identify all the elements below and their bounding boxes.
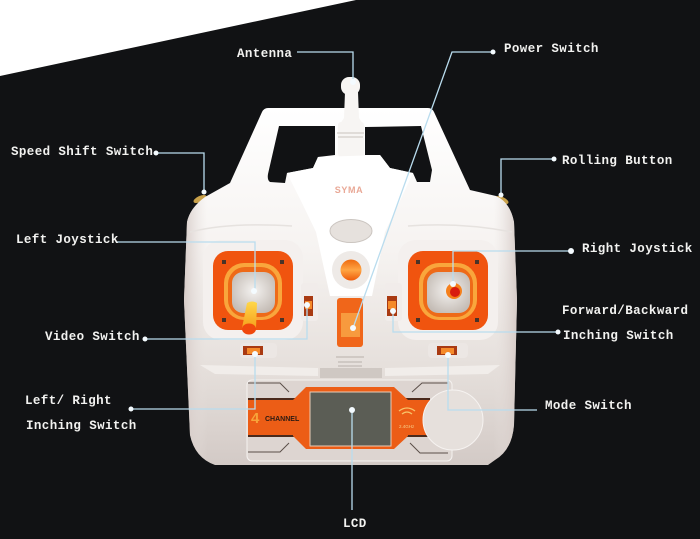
power slider — [336, 298, 364, 366]
right ring — [419, 263, 477, 320]
left ring — [224, 263, 282, 320]
lower ledge — [200, 365, 500, 376]
callout: left joystick: Left Joystick — [16, 233, 119, 247]
orange band — [248, 400, 430, 436]
right screws — [416, 260, 479, 322]
forward backward switch — [385, 283, 402, 321]
front panel — [247, 380, 452, 461]
controller handle and body — [184, 108, 517, 465]
callout: left right inching switch: Left/ Right — [25, 394, 112, 408]
mode switch — [428, 343, 468, 358]
right joystick — [398, 240, 498, 340]
left bezel — [203, 240, 303, 340]
callout: power switch: Power Switch — [504, 42, 599, 56]
left orange housing — [213, 251, 293, 330]
callout: speed shift switch: Speed Shift Switch — [11, 145, 153, 159]
callout: video switch — [45, 302, 310, 344]
oval window — [330, 220, 372, 242]
callout: speed shift switch — [11, 145, 206, 194]
shoulder button right — [494, 194, 510, 206]
video switch — [301, 283, 318, 321]
LCD screen — [310, 392, 391, 446]
callout: left joystick — [16, 233, 257, 294]
callout: video switch: Video Switch — [45, 330, 140, 344]
antenna — [337, 77, 365, 157]
orange lcd surround — [293, 387, 408, 449]
callout: rolling button — [498, 154, 673, 198]
right orange housing — [408, 251, 488, 330]
front panel: 2.4GHz — [399, 424, 415, 429]
callout: LCD: LCD — [343, 517, 367, 531]
callout: LCD — [343, 407, 367, 531]
callout: left right inching switch — [25, 351, 258, 433]
left right switch — [240, 343, 277, 358]
callout: left right inching switch: Inching Switch — [26, 419, 137, 433]
left screws — [222, 260, 284, 322]
left joystick — [203, 240, 303, 340]
controller — [184, 77, 517, 465]
callout: right joystick — [450, 242, 693, 287]
callout: mode switch: Mode Switch — [545, 399, 632, 413]
callout: forward backward inching switch — [390, 304, 688, 343]
circuit traces — [248, 383, 448, 453]
grip highlights — [190, 225, 512, 232]
callout: forward backward inching switch: Inching Switch — [563, 329, 674, 343]
wifi icon — [399, 408, 415, 414]
white corner wedge — [0, 0, 356, 76]
right stick top — [446, 283, 462, 299]
front panel: CHANNEL — [265, 416, 300, 423]
right cup — [427, 272, 470, 313]
callout: power switch — [350, 42, 599, 331]
callout: rolling button: Rolling Button — [562, 154, 673, 168]
SYMA logo: SYMA — [335, 185, 363, 195]
centre housing — [287, 155, 413, 296]
centre button — [332, 251, 370, 289]
callout: right joystick: Right Joystick — [582, 242, 693, 256]
panel base — [247, 380, 452, 461]
shoulder button left — [192, 193, 208, 205]
callout: mode switch — [445, 352, 632, 413]
channel logo: 4 — [251, 410, 260, 427]
callout: antenna — [237, 47, 356, 85]
body edge shading — [184, 183, 517, 465]
right bezel — [398, 240, 498, 340]
left cup — [232, 272, 275, 313]
callout: antenna: Antenna — [237, 47, 292, 61]
callout: forward backward inching switch: Forward/Backward — [562, 304, 688, 318]
left stick — [242, 302, 257, 328]
dial — [423, 390, 483, 450]
